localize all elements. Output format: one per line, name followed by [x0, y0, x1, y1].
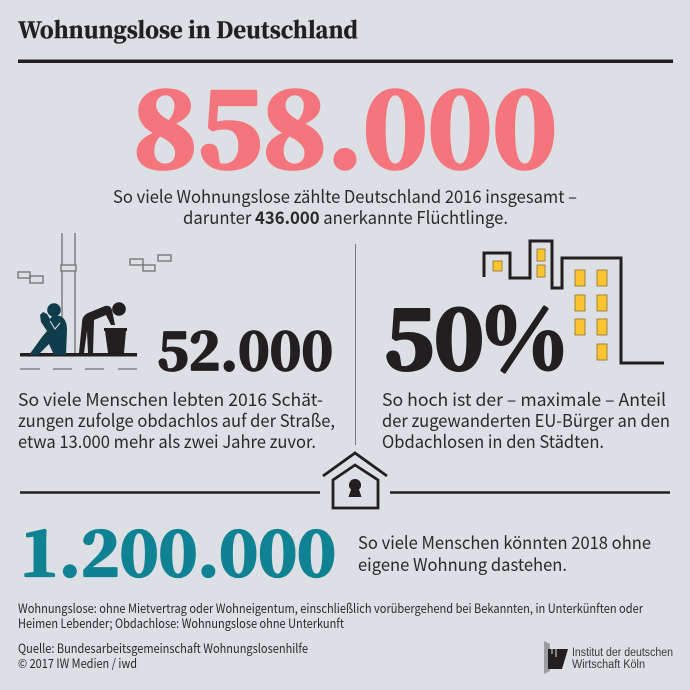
title: Wohnungslose in Deutschland [18, 14, 358, 45]
text: people on the street: zungen zufolge obdachlos auf der Straße, [18, 408, 335, 433]
text: forecast 2018 [358, 530, 651, 577]
intro text [113, 184, 577, 230]
icon: house with keyhole [323, 453, 387, 508]
definitions note: Heimen Lebender; Obdachlose: Wohnungslose ohne Unterkunft [18, 613, 344, 632]
text: forecast 2018: eigene Wohnung dastehen. [358, 552, 567, 577]
logo: Institut der deutschen Wirtschaft Köln: Institut der deutschen [572, 647, 673, 659]
icon: homeless people by a drainpipe [18, 233, 171, 369]
source and copyright: © 2017 IW Medien / iwd [18, 653, 137, 672]
text: EU citizens: Obdachlosen in den Städten. [382, 429, 604, 454]
source and copyright [18, 638, 308, 672]
definitions note [18, 598, 643, 632]
divider lines [20, 491, 670, 494]
logo: Institut der deutschen Wirtschaft Köln: Wirtschaft Köln [572, 659, 645, 671]
text: people on the street: etwa 13.000 mehr als zwei Jahre zuvor. [18, 429, 316, 454]
logo: Institut der deutschen Wirtschaft Köln [544, 641, 673, 674]
text: people on the street [18, 387, 335, 454]
text: forecast 2018: So viele Menschen könnten 2018 ohne [358, 530, 651, 555]
text: EU citizens [382, 387, 670, 454]
text: EU citizens: der zugewanderten EU-Bürger an den [382, 408, 670, 433]
number: 1.200.000: 1.200.000 [20, 504, 336, 595]
intro text: darunter 436.000 anerkannte Flüchtlinge. [183, 205, 508, 230]
number: 52.000: 52.000 [157, 310, 333, 386]
big number: 858.000: 858.000 [133, 47, 557, 198]
source and copyright: Quelle: Bundesarbeitsgemeinschaft Wohnungslosenhilfe [18, 638, 308, 657]
intro text: So viele Wohnungslose zählte Deutschland 2016 insgesamt – [113, 184, 577, 209]
number: 50%: 50% [384, 273, 565, 393]
text: people on the street: So viele Menschen lebten 2016 Schät- [18, 387, 323, 412]
icon: city skyline [484, 241, 664, 363]
text: EU citizens: So hoch ist der – maximale – Anteil [382, 387, 666, 412]
